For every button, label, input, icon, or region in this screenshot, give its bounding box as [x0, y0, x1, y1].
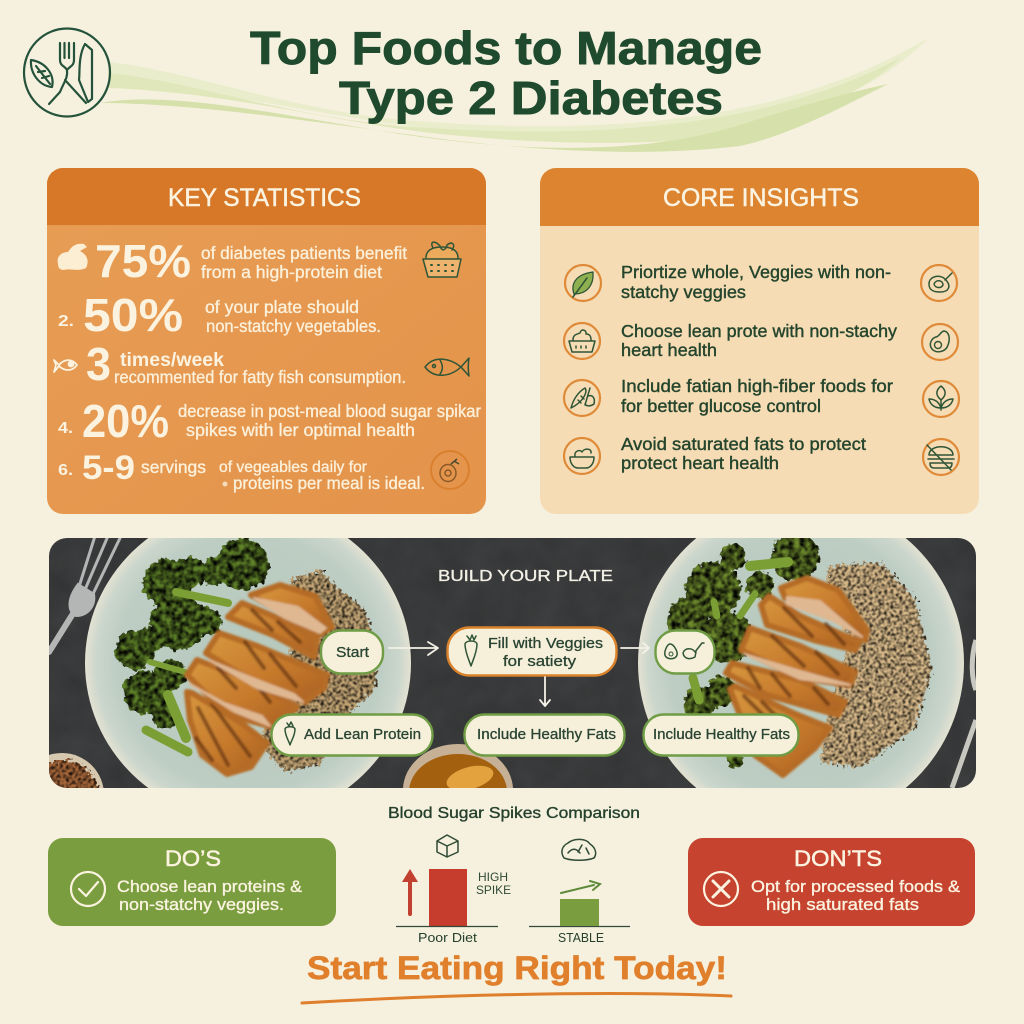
chart heading: Blood Sugar Spikes Comparison: [388, 805, 640, 822]
icon: salad: [562, 839, 596, 860]
insight 3: [564, 376, 959, 417]
core insights header: CORE INSIGHTS: [663, 184, 859, 212]
heading: build your plate: BUILD YOUR PLATE: [438, 568, 613, 585]
stat: 5-9 servings: 6.: [58, 462, 73, 479]
broccoli stems: [693, 562, 788, 700]
title: Top Foods to Manage: [250, 22, 762, 74]
call to action: Start Eating Right Today!: [307, 950, 727, 986]
icon: basket: [423, 242, 461, 277]
stat: 20%: 20%: [82, 395, 169, 447]
quinoa: [260, 570, 378, 772]
stat: 3 times per week: [86, 338, 406, 390]
slice 2: [228, 603, 317, 657]
panel: don'ts: high saturated fats: [766, 895, 919, 914]
step: include healthy fats: [464, 714, 624, 756]
step: fill with veggies: Fill with Veggies: [488, 636, 603, 652]
step: start: [321, 630, 383, 674]
panel: don'ts: DON’TS: [794, 846, 882, 871]
step: start: Start: [336, 645, 369, 661]
slice 1: [251, 585, 332, 634]
plate: [638, 538, 964, 788]
step: fill with veggies: for satiety: [503, 654, 577, 670]
step: fill with veggies: [448, 628, 616, 676]
stat: 50%: 50%: [83, 289, 183, 341]
stable label: STABLE: [558, 931, 604, 945]
slice 1: [781, 578, 867, 640]
slice 3: [741, 628, 855, 685]
step: add lean protein: [272, 714, 432, 756]
panel: don'ts: Opt for processed foods &: [751, 877, 961, 896]
broccoli florets: [115, 538, 269, 729]
panel: do's: DO’S: [165, 846, 221, 871]
stable trend arrow: [561, 881, 600, 893]
plate: [85, 538, 411, 788]
stat: 75%: from a high-protein diet: [201, 262, 382, 282]
stat: 5-9 servings: 5-9: [82, 449, 135, 487]
insight 1: statchy veggies: [621, 282, 746, 302]
panel: key statistics: [47, 168, 486, 514]
step: icon pill avocado and drumstick: [656, 630, 714, 674]
panel: do's: [48, 838, 336, 926]
high spike label: SPIKE: [476, 883, 511, 897]
quinoa: [820, 562, 932, 768]
slice 4: [726, 663, 845, 715]
insight 1: [565, 262, 957, 302]
stable bar: [560, 899, 599, 926]
icon: muscle: [58, 244, 88, 270]
photo panel: build your plate: [49, 538, 976, 788]
icon: round fruit badge: [431, 451, 469, 489]
broccoli florets: [667, 533, 819, 768]
slice 3: [206, 633, 327, 702]
stat: 50%: [58, 289, 381, 341]
logo: fork, knife and leaf: [24, 28, 110, 116]
panel: core insights: [540, 168, 979, 514]
decorative swoosh behind title: [100, 38, 928, 152]
insight 2: heart health: [621, 340, 717, 360]
panel: do's: non-statchy veggies.: [119, 895, 284, 914]
baseline: [396, 926, 630, 928]
stat: 3 times per week: 3: [86, 338, 111, 390]
stat: 50%: of your plate should: [205, 297, 359, 317]
insight 4: [564, 434, 959, 475]
title: Type 2 Diabetes: [339, 72, 723, 124]
slate background: [49, 538, 976, 788]
high spike label: [476, 870, 511, 897]
amber sauce bowl: [403, 744, 513, 788]
broccoli stems: [146, 592, 228, 752]
step: include healthy fats: Include Healthy Fats: [477, 727, 616, 743]
icon: small fish: [54, 360, 77, 372]
insight 2: [564, 321, 958, 360]
stat: 50%: 2.: [58, 313, 74, 330]
insight 2: Choose lean prote with non-stachy: [621, 321, 897, 341]
call to action: [302, 950, 731, 1003]
panel: don'ts: [688, 838, 975, 926]
panel: do's: Choose lean proteins &: [117, 877, 303, 896]
arrow: veggies down to healthy fats: [540, 677, 550, 706]
title: [250, 22, 762, 124]
slice 5: [730, 686, 830, 775]
slice 4: [187, 660, 297, 727]
step: include healthy fats second: [644, 714, 798, 756]
poor diet up arrow: [408, 880, 412, 914]
small bowl left: [49, 753, 104, 788]
poor diet bar: [429, 869, 467, 926]
poor diet label: Poor Diet: [418, 930, 477, 945]
slice 5: [187, 692, 267, 774]
right plate meal: [638, 538, 964, 788]
stat: 5-9 servings: servings: [141, 457, 206, 477]
right spoon: [952, 640, 976, 788]
underline stroke: [302, 994, 731, 1003]
insight 4: protect heart health: [621, 453, 779, 473]
insight 3: for better glucose control: [621, 396, 821, 416]
slice 2: [761, 596, 859, 650]
stat: 20%: 4.: [58, 420, 73, 437]
icon: carrot: [465, 635, 477, 666]
stat: 3 times per week: times/week: [120, 350, 224, 371]
icon: check: [71, 872, 105, 906]
key statistics header: [47, 168, 486, 225]
high spike label: HIGH: [478, 870, 508, 884]
stat: 20%: spikes with ler optimal health: [186, 420, 415, 440]
chicken slices: [187, 585, 332, 774]
core insights header: [540, 168, 979, 226]
step: add lean protein: Add Lean Protein: [304, 727, 421, 743]
insight 3: Include fatian high-fiber foods for: [621, 376, 893, 396]
insight 4: Avoid saturated fats to protect: [621, 434, 866, 454]
stat: 5-9 servings: of vegeables daily for: [219, 459, 368, 476]
step: include healthy fats second: Include Healthy Fats: [653, 727, 790, 743]
fork: [49, 536, 121, 652]
left plate meal: [85, 538, 411, 788]
stat: 75%: [95, 235, 407, 287]
stat: 50%: non-statchy vegetables.: [206, 316, 381, 336]
stat: 20%: decrease in post-meal blood sugar spikar: [178, 401, 481, 421]
arrow: veggies to fats icons: [621, 643, 649, 653]
icon: sugar cube: [437, 835, 458, 857]
stat: 5-9 servings: [58, 449, 425, 493]
stat: 20%: [58, 395, 481, 447]
arrow: start to veggies: [389, 642, 438, 655]
insight 1: Priortize whole, Veggies with non-: [621, 262, 891, 282]
icon: cross: [704, 872, 738, 906]
stat: 75%: 75%: [95, 235, 191, 287]
stat: 3 times per week: recommented for fatty fish consumption.: [114, 367, 406, 387]
stat: 5-9 servings: proteins per meal is ideal.: [233, 473, 425, 493]
arrow head: [402, 869, 418, 882]
key statistics header: KEY STATISTICS: [168, 184, 361, 212]
bar chart: blood sugar comparison: [396, 835, 630, 945]
stat: 75%: of diabetes patients benefit: [201, 243, 407, 263]
icon: fish: [425, 358, 469, 376]
chicken slices: [726, 578, 867, 775]
